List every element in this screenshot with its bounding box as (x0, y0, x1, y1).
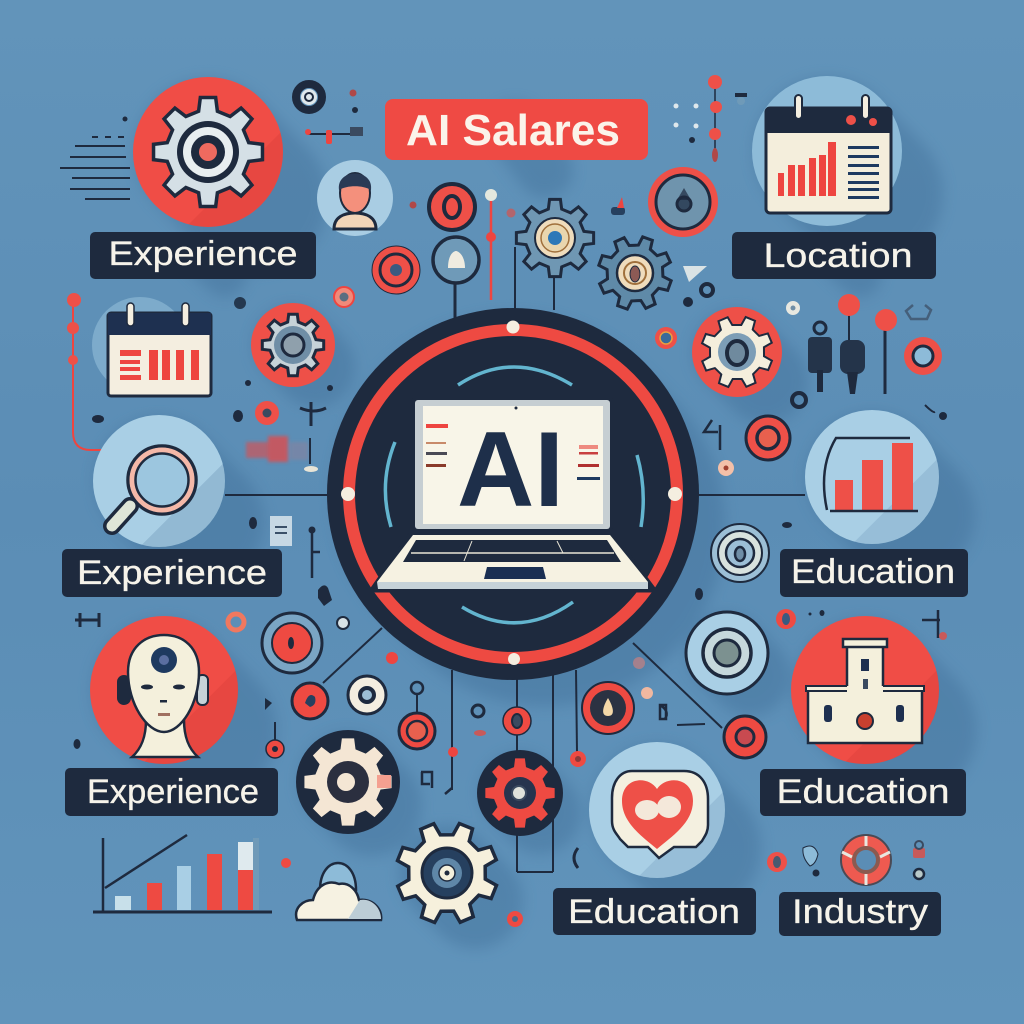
icon: magnifier (93, 415, 225, 547)
label: experience middle (62, 549, 282, 597)
connector lines (73, 200, 885, 872)
icon: gear in red disc left (251, 303, 335, 387)
icon: calendar chart top right (752, 76, 902, 226)
icon: gears upper centre (516, 199, 682, 320)
laptop screen: AI (457, 409, 564, 529)
icon: ladder marks (249, 516, 332, 606)
icon: scattered dots top right (674, 75, 747, 162)
label: location: Location (764, 237, 912, 275)
icon: calendar left (92, 297, 211, 396)
icon: small circles lower centre (503, 657, 705, 767)
icon: red ring far right (655, 327, 942, 375)
label: experience bottom (65, 768, 278, 816)
chart: line and bars (93, 835, 272, 912)
icon: scattered marks left (92, 385, 333, 472)
laptop base (372, 534, 654, 590)
label: education bottom: Education (568, 893, 740, 931)
label: experience middle: Experience (77, 554, 267, 592)
label: location (732, 232, 936, 279)
icon: big gear dark (296, 730, 400, 834)
icon: person (317, 160, 393, 236)
icon: robot face (90, 616, 238, 764)
icon: small rings right (704, 302, 947, 476)
icon: ring right lower (686, 609, 947, 758)
central laptop emblem (327, 308, 699, 680)
icon: building (791, 616, 939, 764)
label: education right (760, 769, 966, 816)
label: industry: Industry (792, 893, 928, 931)
label: industry (779, 892, 941, 936)
title: AI Salares (406, 106, 620, 155)
icon: small ring top (296, 84, 363, 144)
icon: text lines (60, 116, 130, 199)
icon: gear right middle (695, 522, 792, 600)
label: experience top (90, 232, 316, 279)
label: experience bottom: Experience (87, 773, 259, 811)
label: education right: Education (776, 773, 950, 811)
icon: red gear dark disc (477, 750, 563, 836)
icon: gear in red circle (133, 77, 283, 227)
icon: red ring upper right (611, 167, 718, 307)
icon: red dots on left line (67, 293, 251, 386)
icon: people and pins right (808, 294, 931, 394)
icon: small rings upper middle (334, 184, 516, 307)
label: experience top: Experience (108, 235, 298, 273)
title (385, 99, 648, 160)
laptop screen (412, 396, 613, 531)
icon: lifebuoy and small marks (767, 835, 925, 885)
label: education middle: Education (791, 553, 955, 591)
label: education bottom (553, 888, 756, 935)
icon: gear in red disc right (691, 306, 783, 398)
icon: heart speech bubble (589, 742, 725, 878)
icon: bar chart circle (805, 410, 939, 544)
label: education middle (780, 549, 968, 597)
icon: gear bottom (381, 807, 578, 939)
icon: cloud (281, 858, 381, 920)
icon: rings lower left (74, 613, 486, 794)
